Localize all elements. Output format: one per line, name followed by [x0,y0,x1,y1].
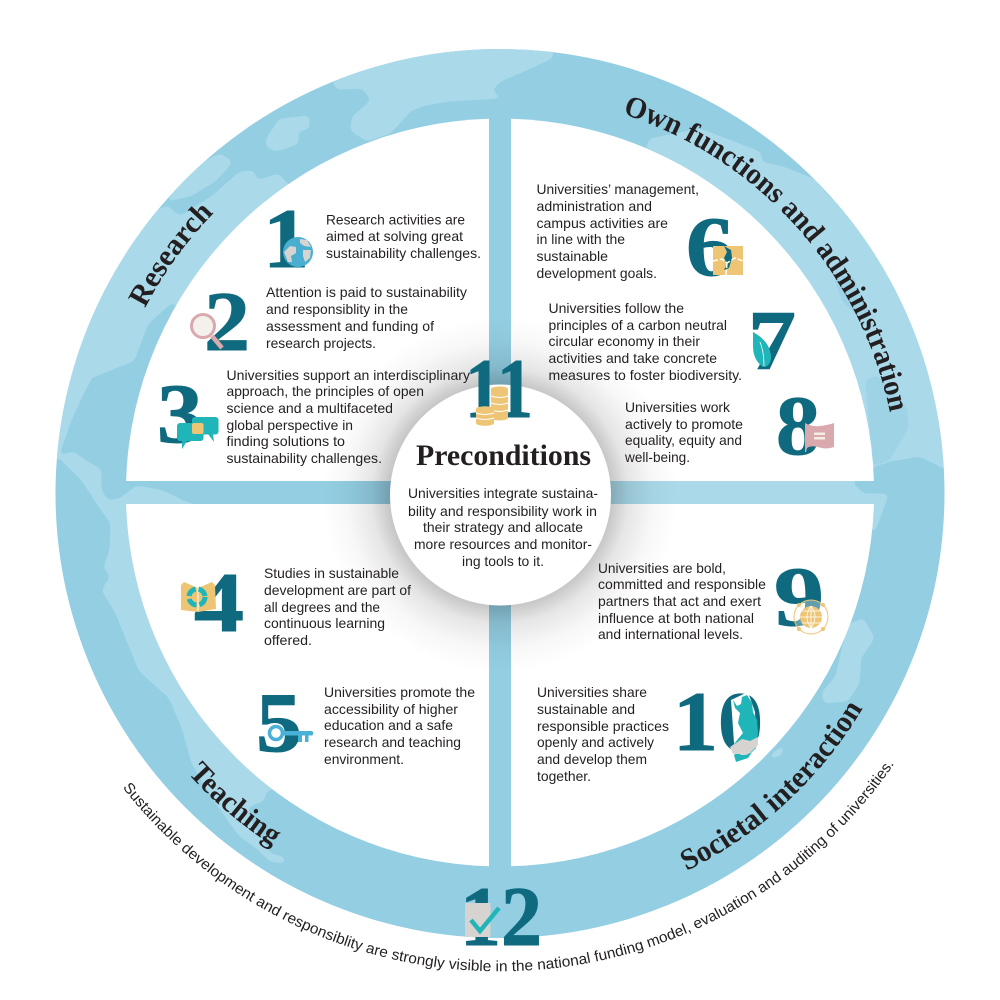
text block 11: more resources and monitor- [414,536,592,552]
panel: own functions and administration quadrant [511,119,874,481]
text block 8: equality, equity and [625,432,742,448]
text block 6: development goals. [536,265,657,281]
item 4 number: 4 [194,556,244,650]
text block 5: environment. [324,751,404,767]
item 10 number: 10 [673,675,763,769]
text block 1 [326,212,481,261]
text block 6: sustainable [536,248,608,264]
icon: leaf [753,332,771,367]
heading: Preconditions: Preconditions [416,439,591,472]
text block 9: Universities are bold, [598,560,726,576]
heading: Societal interaction: Societal interaction [680,704,863,870]
text block 4: offered. [264,632,312,648]
text block 3 [226,367,470,466]
text block 3: finding solutions to [226,433,345,449]
item 6 number: 6 [686,200,734,294]
icon: checkbox [465,903,499,937]
text block 3: sustainability challenges. [226,450,382,466]
text block 6: campus activities are [536,215,668,231]
text block 1: aimed at solving great [326,228,463,244]
item 1 number: 1 [263,192,309,286]
text block 5: Universities promote the [324,684,475,700]
text block 11: Universities integrate sustaina- [408,485,598,501]
icon: Finland map with handshake [730,692,758,762]
text block 7: circular economy in their [548,333,700,349]
icon: magnifier [192,314,222,348]
icon: puzzle [713,246,743,275]
text block 11: bility and responsibility work in [408,503,597,519]
icon: globe [283,237,313,267]
icon: equality flag [805,423,834,452]
text block 9: committed and responsible [598,576,766,592]
text block 11 [408,485,598,569]
text block 6: in line with the [536,231,625,247]
text block 9: and international levels. [598,626,743,642]
text block 7 [548,300,742,383]
panel: societal interaction quadrant [511,504,874,866]
item 9 number: 9 [774,550,824,644]
text block 9 [598,560,766,642]
text block 2: research projects. [266,335,376,351]
text block 1: Research activities are [326,212,465,228]
heading: Teaching: Teaching [190,760,280,850]
text block 7: principles of a carbon neutral [548,317,727,333]
text block 2: and responsiblity in the [266,301,408,317]
text block 4: continuous learning [264,615,385,631]
centre shadow [322,317,678,673]
item 2 number: 2 [204,275,250,369]
text block 3: global perspective in [226,417,353,433]
text block 8: Universities work [625,399,731,415]
panel: research quadrant [126,119,489,481]
text block 7: measures to foster biodiversity. [548,367,742,383]
text block 8: actively to promote [625,416,743,432]
panel: teaching quadrant [126,504,489,866]
text block 6: administration and [536,198,652,214]
text block 10: sustainable and [537,701,635,717]
text block 4: development are part of [264,582,411,598]
item 3 number: 3 [157,367,203,461]
icon: speech bubbles [177,417,218,449]
item 11 number: 11 [465,342,533,436]
text block 9: partners that act and exert [598,593,761,609]
text block 5: research and teaching [324,734,461,750]
text block 7: activities and take concrete [548,350,717,366]
text block 4: all degrees and the [264,599,380,615]
text block 10 [537,684,669,784]
heading: Research: Research [128,206,214,308]
text block 5 [324,684,475,767]
text block 5: accessibility of higher [324,701,458,717]
text block 3: Universities support an interdisciplinary [226,367,470,383]
icon: key [270,726,313,742]
icon: coin stacks [476,386,508,426]
text block 10: openly and actively [537,734,654,750]
text block 10: responsible practices [537,718,669,734]
text block 9: influence at both national [598,610,754,626]
curved caption: Sustainable development and responsiblity are strongly visible in the national funding model, evaluation and auditing of universities. [124,764,894,972]
text block 4: Studies in sustainable [264,565,399,581]
text block 7: Universities follow the [548,300,684,316]
text block 11: their strategy and allocate [423,519,583,535]
text block 2: assessment and funding of [266,318,434,334]
text block 6 [536,181,699,281]
text block 10: Universities share [537,684,647,700]
text block 6: Universities’ management, [536,181,699,197]
text block 8 [624,399,743,465]
centre circle [390,384,611,606]
heading: Own functions and administration: Own functions and administration [626,98,903,412]
item 12 number: 12 [460,870,542,964]
text block 8: well-being. [624,449,690,465]
text block 2: Attention is paid to sustainability [266,284,467,300]
text block 4 [264,565,411,648]
text block 1: sustainability challenges. [326,245,481,261]
icon: book with recycling symbol [181,582,216,612]
text block 2 [266,284,467,351]
text block 11: ing tools to it. [462,553,544,569]
item 8 number: 8 [776,379,820,473]
icon: world network [794,600,828,634]
item 5 number: 5 [256,676,302,770]
text block 10: together. [537,768,591,784]
text block 3: science and a multifaceted [226,400,393,416]
item 7 number: 7 [748,294,796,388]
text block 10: and develop them [537,751,647,767]
text block 3: approach, the principles of open [226,383,424,399]
text block 5: education and a safe [324,717,453,733]
